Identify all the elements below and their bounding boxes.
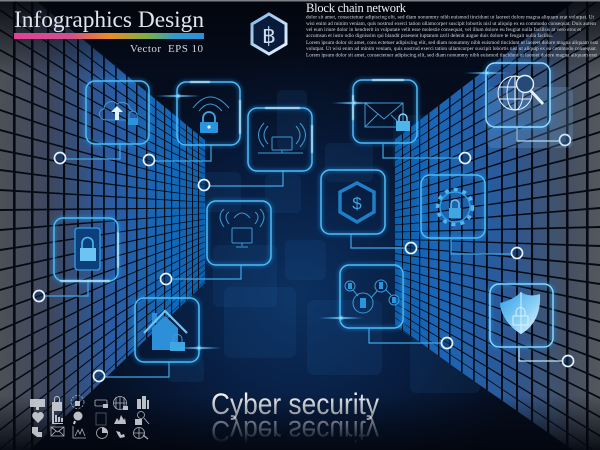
icon: group — [137, 396, 149, 409]
panel: bitcoin dollar hexagon — [321, 170, 416, 254]
flare — [330, 100, 378, 106]
panel: people network — [317, 265, 452, 348]
panel: email lock — [330, 80, 470, 164]
icon: envelope — [51, 427, 64, 436]
text block: Block chain network: vel eum iriure dolor in hendrerit in vulputate velit esse molestie consequat, vel illum dolore eu feugiat nulla facilisis at vero eros et — [306, 26, 581, 33]
subtitle: Vector EPS 10 — [130, 43, 204, 55]
title: Cyber security: Cyber security — [211, 388, 379, 421]
icon: heart — [32, 412, 44, 423]
flare — [175, 344, 223, 352]
icon: document — [96, 413, 106, 425]
icon: magnifier plus — [74, 412, 82, 424]
icon: blockchain hexagon logo — [252, 14, 286, 54]
icon: hand keypad — [32, 427, 42, 437]
icon: connected users — [345, 280, 399, 313]
panel: laptop wifi — [198, 108, 312, 190]
flare — [463, 70, 511, 76]
icon: blockchain hexagon logo: ฿ — [262, 23, 276, 48]
icon: wifi padlock — [193, 97, 229, 133]
icon: globe — [114, 396, 128, 410]
panel: monitor wifi — [160, 201, 271, 284]
panel: wifi lock — [144, 82, 240, 166]
header title: Infographics Design — [14, 7, 204, 55]
icon: shield — [500, 292, 540, 334]
icon: monitor with signal — [258, 123, 306, 153]
icon: dollar hexagon: $ — [352, 194, 362, 213]
icon: globe search — [134, 428, 148, 439]
icon: house with lock — [144, 311, 187, 351]
text block: Block chain network — [306, 1, 598, 58]
text block: Block chain network: accumsan et iusto odio dignissim qui blandit praesent luptatum zzril delenit augue duis dolore te feugait nulla facilisi. — [306, 32, 554, 39]
icon: line chart — [73, 426, 86, 438]
icon: cloud upload with lock — [99, 102, 138, 125]
icon: globe with magnifier — [498, 76, 543, 110]
flare — [317, 314, 365, 322]
icon: tools — [116, 431, 125, 438]
icon: lock search — [135, 412, 149, 425]
title reflection: Cyber security — [211, 414, 379, 447]
icon: monitor — [30, 399, 45, 410]
icon: gear lock — [71, 396, 84, 408]
icon: smartphone padlock — [75, 228, 100, 270]
icon: bar chart — [52, 411, 63, 424]
flare — [154, 92, 202, 100]
left perspective grid wall — [0, 2, 205, 449]
panel: globe search — [463, 63, 573, 148]
right perspective grid wall — [395, 2, 600, 450]
icon: card — [95, 400, 108, 408]
icon: monitor with signal — [220, 209, 264, 247]
panel: security shield — [490, 284, 574, 366]
title: Cyber security — [211, 388, 379, 447]
translucent floating squares — [168, 90, 480, 393]
icon: area chart — [114, 415, 126, 424]
icon: pie chart — [96, 427, 108, 438]
panel: gear lock — [421, 175, 522, 258]
rainbow bar — [14, 33, 204, 39]
panel: cloud lock — [54, 81, 149, 164]
panel: home lock — [94, 298, 223, 382]
icon set: small white icons — [30, 396, 149, 439]
icon: padlock — [52, 396, 62, 411]
panel: phone lock — [34, 218, 118, 302]
header title: Infographics Design: Infographics Design — [14, 7, 204, 32]
text block: Block chain network: Block chain network — [306, 1, 407, 15]
icon: envelope with lock — [365, 103, 410, 131]
icon: gear padlock — [438, 190, 472, 224]
